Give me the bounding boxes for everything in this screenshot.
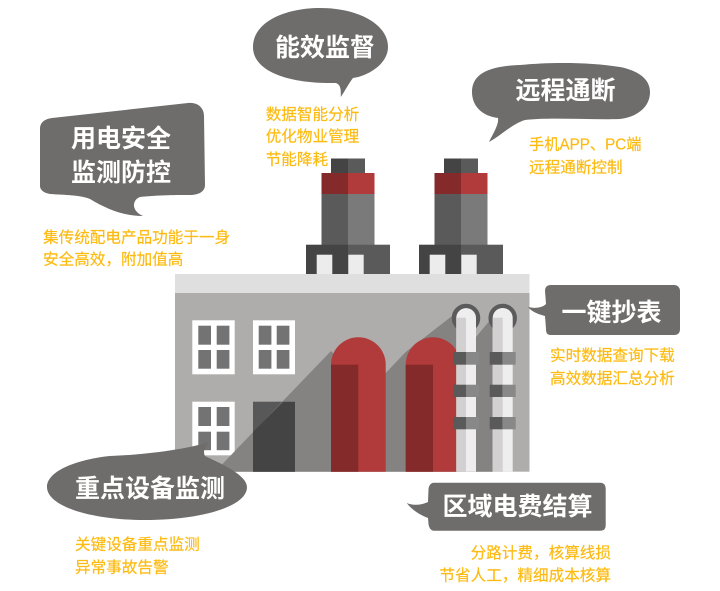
red arch right [406,337,460,472]
callout: 一键抄表 [528,285,680,335]
text: 能效监督 description [266,106,360,168]
text: 区域电费结算 description [439,543,611,584]
chimney left [306,158,390,275]
factory wall [175,293,530,472]
bubble: 重点设备监测 [47,442,247,520]
callout: 远程通断 [472,63,650,142]
text: 能效监督 description: 数据智能分析 [266,106,359,124]
bubble: 区域电费结算 [407,483,606,531]
chimney right [419,158,503,275]
text: 区域电费结算 description: 分路计费，核算线损 [471,543,611,562]
bubble: 一键抄表 [528,285,680,335]
text: 一键抄表 description: 实时数据查询下载 [550,346,675,364]
callout: 重点设备监测 [47,442,247,520]
text: 一键抄表 description [550,346,675,388]
callout: 区域电费结算 [407,483,606,531]
text: 远程通断 description [529,136,642,176]
red arch left [331,337,386,472]
text: 能效监督 description: 优化物业管理 [266,128,360,146]
callout: 用电安全监测防控 [40,103,205,216]
text: 一键抄表 description: 高效数据汇总分析 [550,370,675,388]
bubble: 远程通断 [472,63,650,142]
callout: 用电安全监测防控: 监测防控 [71,159,171,187]
text: 远程通断 description: 手机APP、PC端 [529,136,642,154]
factory illustration [175,158,530,472]
heading: 远程通断: 远程通断 [516,77,616,105]
windows [192,320,295,455]
door shaded part [253,402,295,472]
heading: 用电安全监测防控: 用电安全 [71,125,171,153]
text: 用电安全 description: 安全高效，附加值高 [43,250,183,268]
pipe left [453,306,479,472]
text: 用电安全 description: 集传统配电产品功能于一身 [43,228,230,246]
bubble: 用电安全监测防控 [40,103,205,216]
text: 重点设备监测 description: 关键设备重点监测 [75,536,200,554]
heading: 区域电费结算: 区域电费结算 [442,493,593,521]
heading: 能效监督: 能效监督 [275,34,375,62]
pipe right [490,306,516,472]
text: 重点设备监测 description [75,536,200,576]
text: 区域电费结算 description: 节省人工，精细成本核算 [439,566,611,584]
text: 能效监督 description: 节能降耗 [266,150,328,168]
roof band [175,274,530,293]
door [253,402,295,472]
diagonal shadow [215,316,493,472]
heading: 重点设备监测: 重点设备监测 [75,475,225,503]
text: 用电安全 description [43,228,230,268]
text: 远程通断 description: 远程通断控制 [529,158,623,176]
callout: 能效监督 [253,8,388,97]
text: 重点设备监测 description: 异常事故告警 [75,558,169,576]
bubble: 能效监督 [253,8,388,97]
heading: 一键抄表: 一键抄表 [562,299,662,327]
